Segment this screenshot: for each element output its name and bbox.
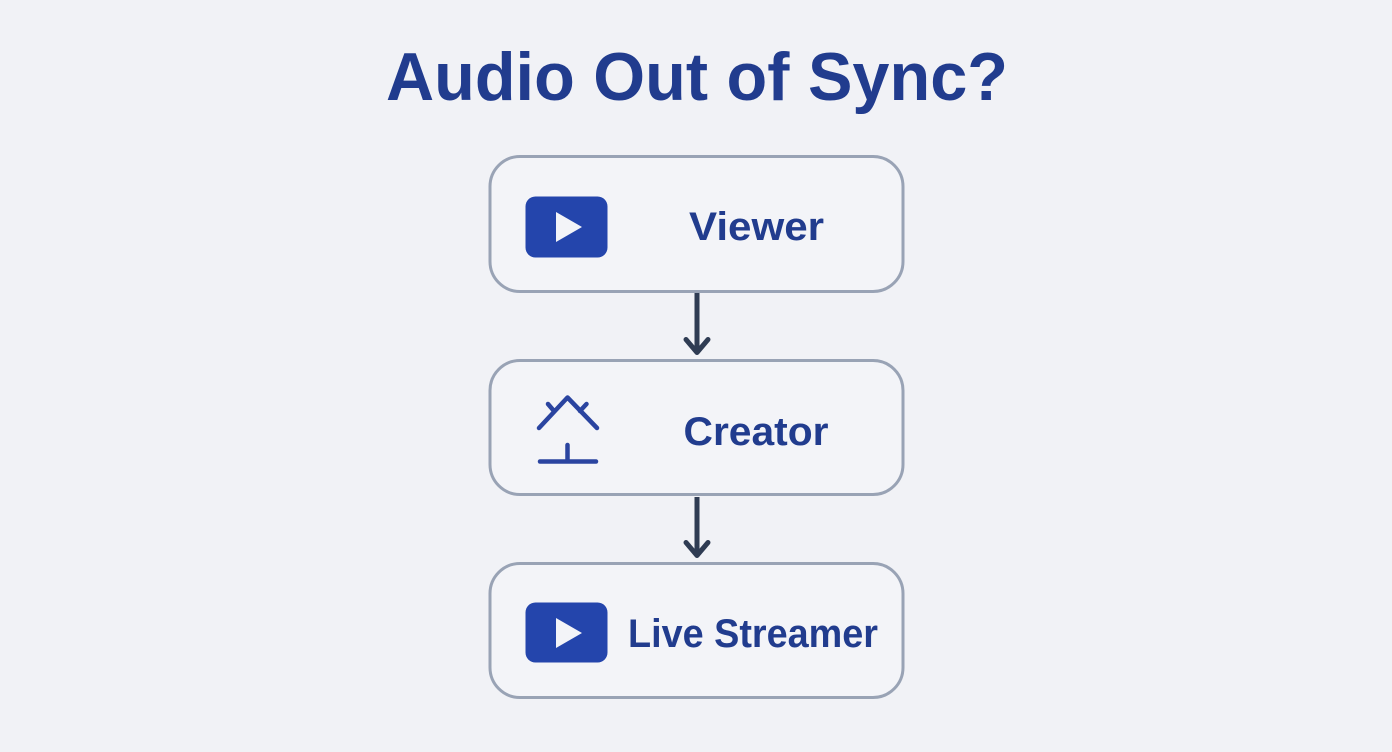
icon: viewer play button <box>526 196 608 258</box>
label: creator: Creator <box>684 410 828 454</box>
arrow: viewer to creator <box>686 293 708 352</box>
label: viewer: Viewer <box>689 205 824 249</box>
panel: viewer <box>490 156 903 292</box>
arrow: creator to live streamer <box>686 497 708 556</box>
icon: live streamer play button <box>526 602 608 662</box>
label: live streamer: Live Streamer <box>628 612 878 656</box>
panel: creator <box>490 360 903 494</box>
title: Audio Out of Sync? <box>386 39 1008 115</box>
icon: creator roof and stand <box>539 398 597 462</box>
panel: live streamer <box>490 564 903 698</box>
